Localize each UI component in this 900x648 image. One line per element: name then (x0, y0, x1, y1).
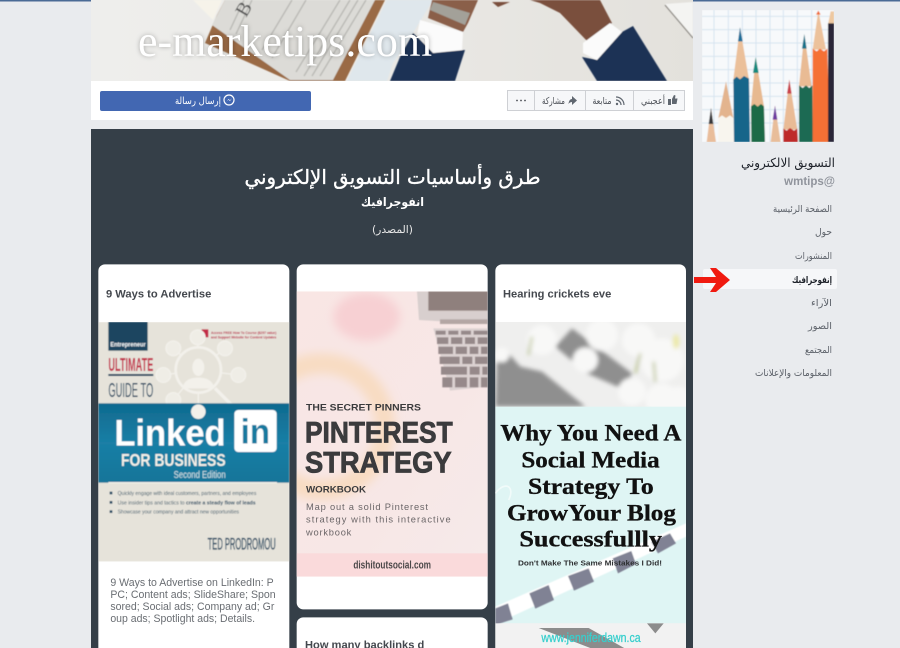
cover photo (91, 0, 693, 81)
pencils (707, 11, 834, 142)
workbook cover: Map out a solid Pinterest (306, 502, 428, 512)
action bar (91, 81, 693, 120)
blog cover: Strategy To (528, 474, 654, 500)
card 4: backlinks (297, 617, 488, 648)
button: send message (100, 91, 311, 111)
book cover: and Support Website for Content Updates (211, 336, 276, 340)
sidebar navigation: الصفحة الرئيسية (773, 204, 832, 215)
sidebar navigation: الصور (807, 321, 832, 332)
bullet list: Quickly engage with ideal customers, partners, and employees (118, 491, 256, 497)
blue band (98, 403, 289, 483)
workbook cover: WORKBOOK (306, 485, 366, 495)
sidebar navigation (703, 204, 837, 379)
bullet list (110, 491, 256, 516)
watermark shadow: e-marketips.com (138, 17, 432, 66)
sidebar navigation: حول (815, 227, 832, 238)
blog cover: Why You Need A (500, 421, 681, 447)
book cover: TED PRODROMOU (208, 534, 276, 553)
blog cover: Don't Make The Same Mistakes I Did! (518, 559, 662, 568)
button: follow: متابعة (592, 96, 612, 107)
button: more (516, 100, 526, 101)
book cover: FOR BUSINESS (121, 450, 226, 470)
button: share: مشاركة (542, 96, 565, 107)
card description: oup ads; Spotlight ads; Details. (110, 613, 255, 625)
sidebar navigation: الآراء (811, 297, 832, 309)
sidebar page picture (702, 10, 834, 142)
bullet list: Showcase your company and attract new opportunities (118, 510, 239, 516)
card title: Hearing crickets eve (503, 288, 611, 300)
book cover: ULTIMATE (108, 354, 153, 375)
card title: 9 Ways to Advertise (106, 288, 211, 300)
top navigation strip (0, 0, 900, 2)
flowers and stripes (495, 322, 686, 407)
book cover: Access FREE How To Course ($297 value) (211, 331, 276, 335)
book cover: GUIDE TO (108, 379, 153, 402)
dark content panel (91, 129, 693, 648)
blog cover: www.jenniferdawn.ca (540, 631, 641, 645)
card 3: social media strategy (495, 264, 692, 648)
page action buttons (508, 90, 684, 111)
blog cover: GrowYour Blog (507, 501, 676, 527)
watermark: e-marketips.com (138, 17, 432, 66)
source note: (المصدر) (372, 224, 413, 236)
workbook cover (296, 291, 488, 576)
button: like: أعجبني (641, 94, 665, 107)
blog cover (495, 319, 692, 648)
book cover: Entrepreneur (110, 342, 146, 349)
card 2: Pinterest (296, 264, 488, 610)
striped pencil (495, 523, 686, 625)
book cover: in (241, 412, 270, 451)
sidebar navigation: المجتمع (805, 345, 832, 356)
sidebar navigation: إنفوجرافيك (792, 275, 832, 286)
workbook cover: strategy with this interactive (306, 515, 451, 525)
arrow: points to infographic tab (694, 268, 730, 292)
book cover (98, 322, 289, 562)
subheading: انفوجرافيك (361, 195, 424, 210)
button: like (641, 94, 678, 107)
card description: sored; Social ads; Company ad; Gr (110, 601, 275, 613)
paper text lines (230, 0, 366, 76)
workbook cover: dishitoutsocial.com (353, 560, 431, 572)
blog cover: Successfullly (519, 527, 662, 553)
card description: PC; Content ads; SlideShare; Spon (110, 589, 276, 601)
laptop (417, 291, 488, 391)
sidebar navigation: المنشورات (795, 251, 832, 262)
book cover: Linked (114, 411, 226, 453)
workbook cover: workbook (305, 527, 352, 537)
network icon (156, 330, 246, 412)
workbook cover: THE SECRET PINNERS (306, 403, 421, 413)
card description (110, 577, 276, 625)
book cover: Second Edition (174, 470, 226, 481)
blog cover: Social Media (521, 447, 660, 473)
sidebar navigation: المعلومات والإعلانات (755, 368, 832, 379)
sidebar page name: التسويق الالكتروني (741, 155, 835, 171)
button: send message: إرسال رسالة (175, 96, 221, 107)
card description: 9 Ways to Advertise on LinkedIn: P (110, 577, 274, 589)
bullet list: Use insider tips and tactics to create a steady flow of leads (118, 500, 256, 506)
footer band (495, 623, 503, 648)
card 1: LinkedIn (98, 264, 289, 648)
workbook cover: PINTEREST (305, 417, 453, 450)
workbook cover: STRATEGY (305, 447, 452, 480)
sidebar handle: wmtips@ (783, 176, 835, 188)
heading: طرق وأساسيات التسويق الإلكتروني (244, 164, 540, 190)
